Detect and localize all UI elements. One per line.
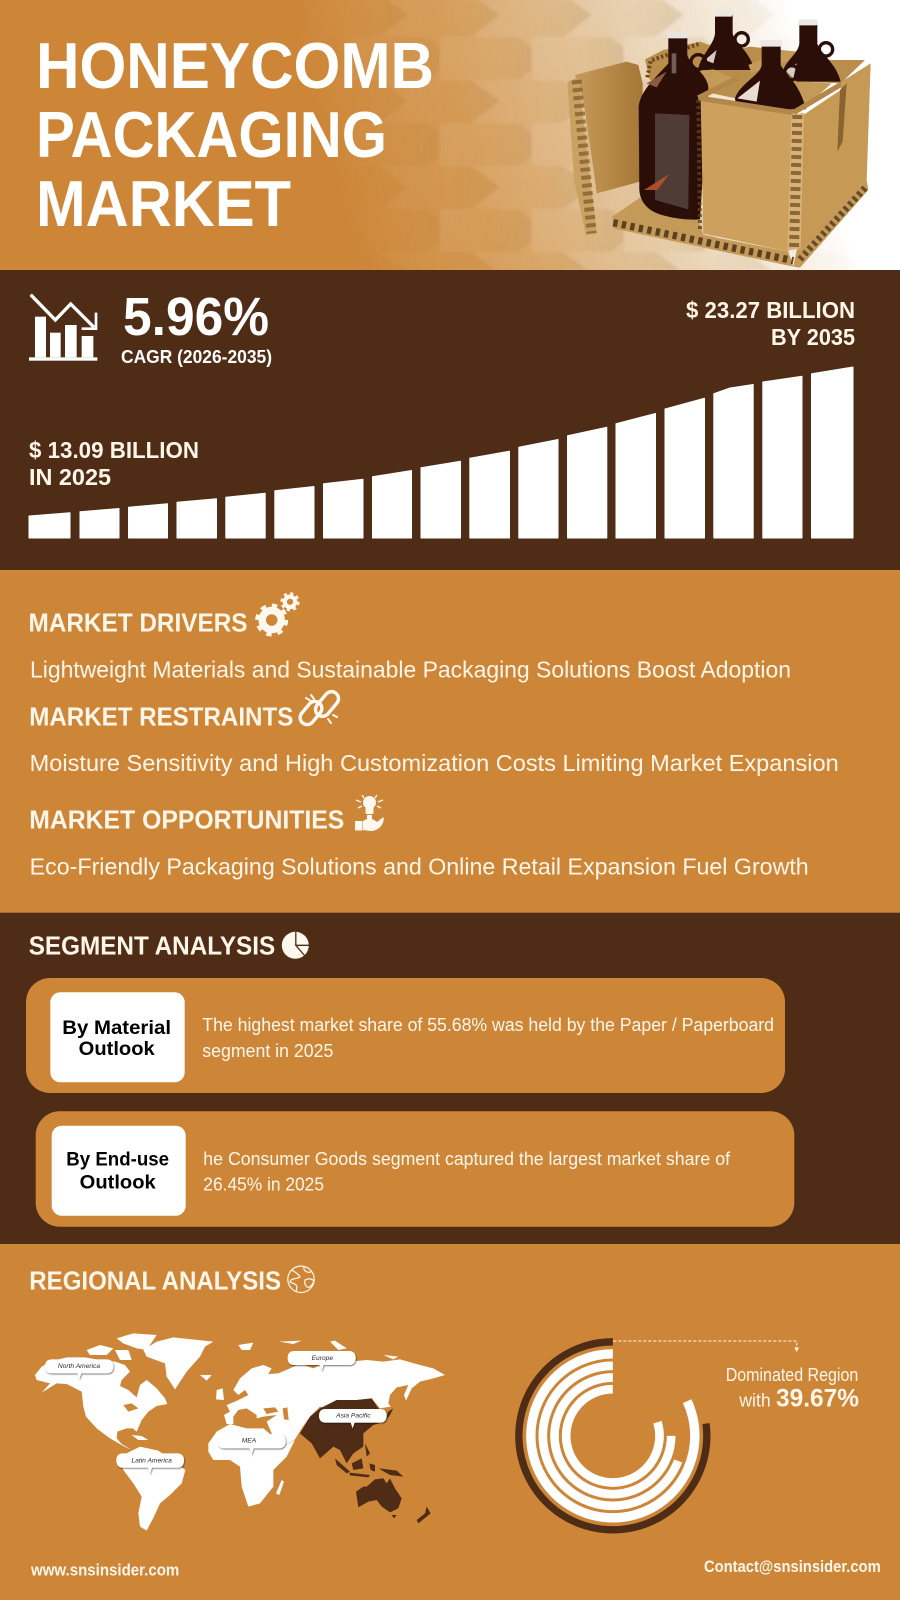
title: PACKAGING [36,98,387,171]
card: by material outlook [26,978,785,1093]
card: by material outlook: Outlook [79,1038,155,1060]
radial chart [519,1342,707,1530]
callout: latin america: Latin America [131,1457,172,1464]
side panel [787,63,871,251]
callout: asia pacific: Asia Pacific [335,1413,371,1420]
start value label: IN 2025 [29,464,111,490]
dashed leader line [613,1341,799,1352]
end value label [686,297,855,350]
callout: latin america [116,1453,184,1474]
dominated region callout [726,1365,859,1413]
icon: growth chart [29,295,97,361]
illustration: honeycomb box with bottles [567,11,871,268]
card: by end-use outlook: Outlook [80,1171,156,1193]
heading: market drivers: MARKET DRIVERS [28,608,248,638]
text: restraints description: Moisture Sensitivity and High Customization Costs Limiting Market Expansion [30,750,839,776]
icon: globe [288,1266,314,1293]
title: HONEYCOMB [36,29,434,102]
stats band [0,270,900,570]
dominated region callout: with [738,1391,771,1411]
text: opportunities description: Eco-Friendly Packaging Solutions and Online Retail Expansion Fuel Growth [30,854,809,880]
icon: broken chain [297,689,341,727]
card: by end-use outlook: he Consumer Goods segment captured the largest market share of [203,1149,731,1169]
card: by material outlook: segment in 2025 [202,1041,333,1061]
card: by material outlook: By Material [62,1017,171,1039]
start value label: $ 13.09 BILLION [29,437,199,463]
text: drivers description: Lightweight Materials and Sustainable Packaging Solutions Boost Adoption [30,656,791,682]
base board [612,180,868,268]
card: by material outlook: The highest market share of 55.68% was held by the Paper / Paperboard [202,1015,774,1035]
heading: market opportunities: MARKET OPPORTUNITIES [29,804,344,834]
front panel [698,78,842,252]
left flap [567,62,643,235]
footer: website: www.snsinsider.com [30,1560,179,1580]
inner dividers [695,51,832,108]
icon: bulb in hand [355,795,384,831]
cagr value: CAGR (2026-2035) [121,347,272,367]
heading: segment analysis: SEGMENT ANALYSIS [29,930,275,960]
callout: mea [218,1434,286,1455]
icon: pie chart [282,932,309,959]
icon: gears [257,594,298,634]
dominated region callout: 39.67% [776,1385,859,1413]
end value label: $ 23.27 BILLION [686,297,855,323]
card: by end-use outlook: 26.45% in 2025 [203,1175,324,1195]
cagr value: 5.96% [123,287,269,347]
dominated region callout: Dominated Region [726,1365,858,1385]
heading: regional analysis: REGIONAL ANALYSIS [29,1266,281,1296]
panel: segment analysis [0,913,900,1244]
callout: europe: Europe [312,1355,333,1362]
world map [35,1333,445,1531]
heading: market restraints: MARKET RESTRAINTS [29,702,293,732]
back panels [645,42,865,100]
card: by end-use outlook [36,1111,794,1227]
map: asia pacific highlighted [300,1398,431,1523]
header band [320,0,900,270]
title [36,29,434,240]
callout: north america [45,1359,113,1379]
back bottles [698,11,841,82]
front bottle [639,32,708,220]
callout: mea: MEA [242,1438,257,1445]
end value label: BY 2035 [771,324,855,350]
panel: market drivers, restraints, opportunities [28,594,839,880]
callout: north america: North America [58,1363,100,1370]
callout: europe [288,1351,356,1371]
third bottle [735,40,806,109]
bar chart [29,367,853,538]
map: white regions [35,1333,445,1531]
start value label [29,437,199,490]
callout: asia pacific [319,1409,387,1428]
title: MARKET [36,167,291,240]
map: lakes and seas [123,1403,289,1420]
card: by end-use outlook: By End-use [66,1149,169,1171]
